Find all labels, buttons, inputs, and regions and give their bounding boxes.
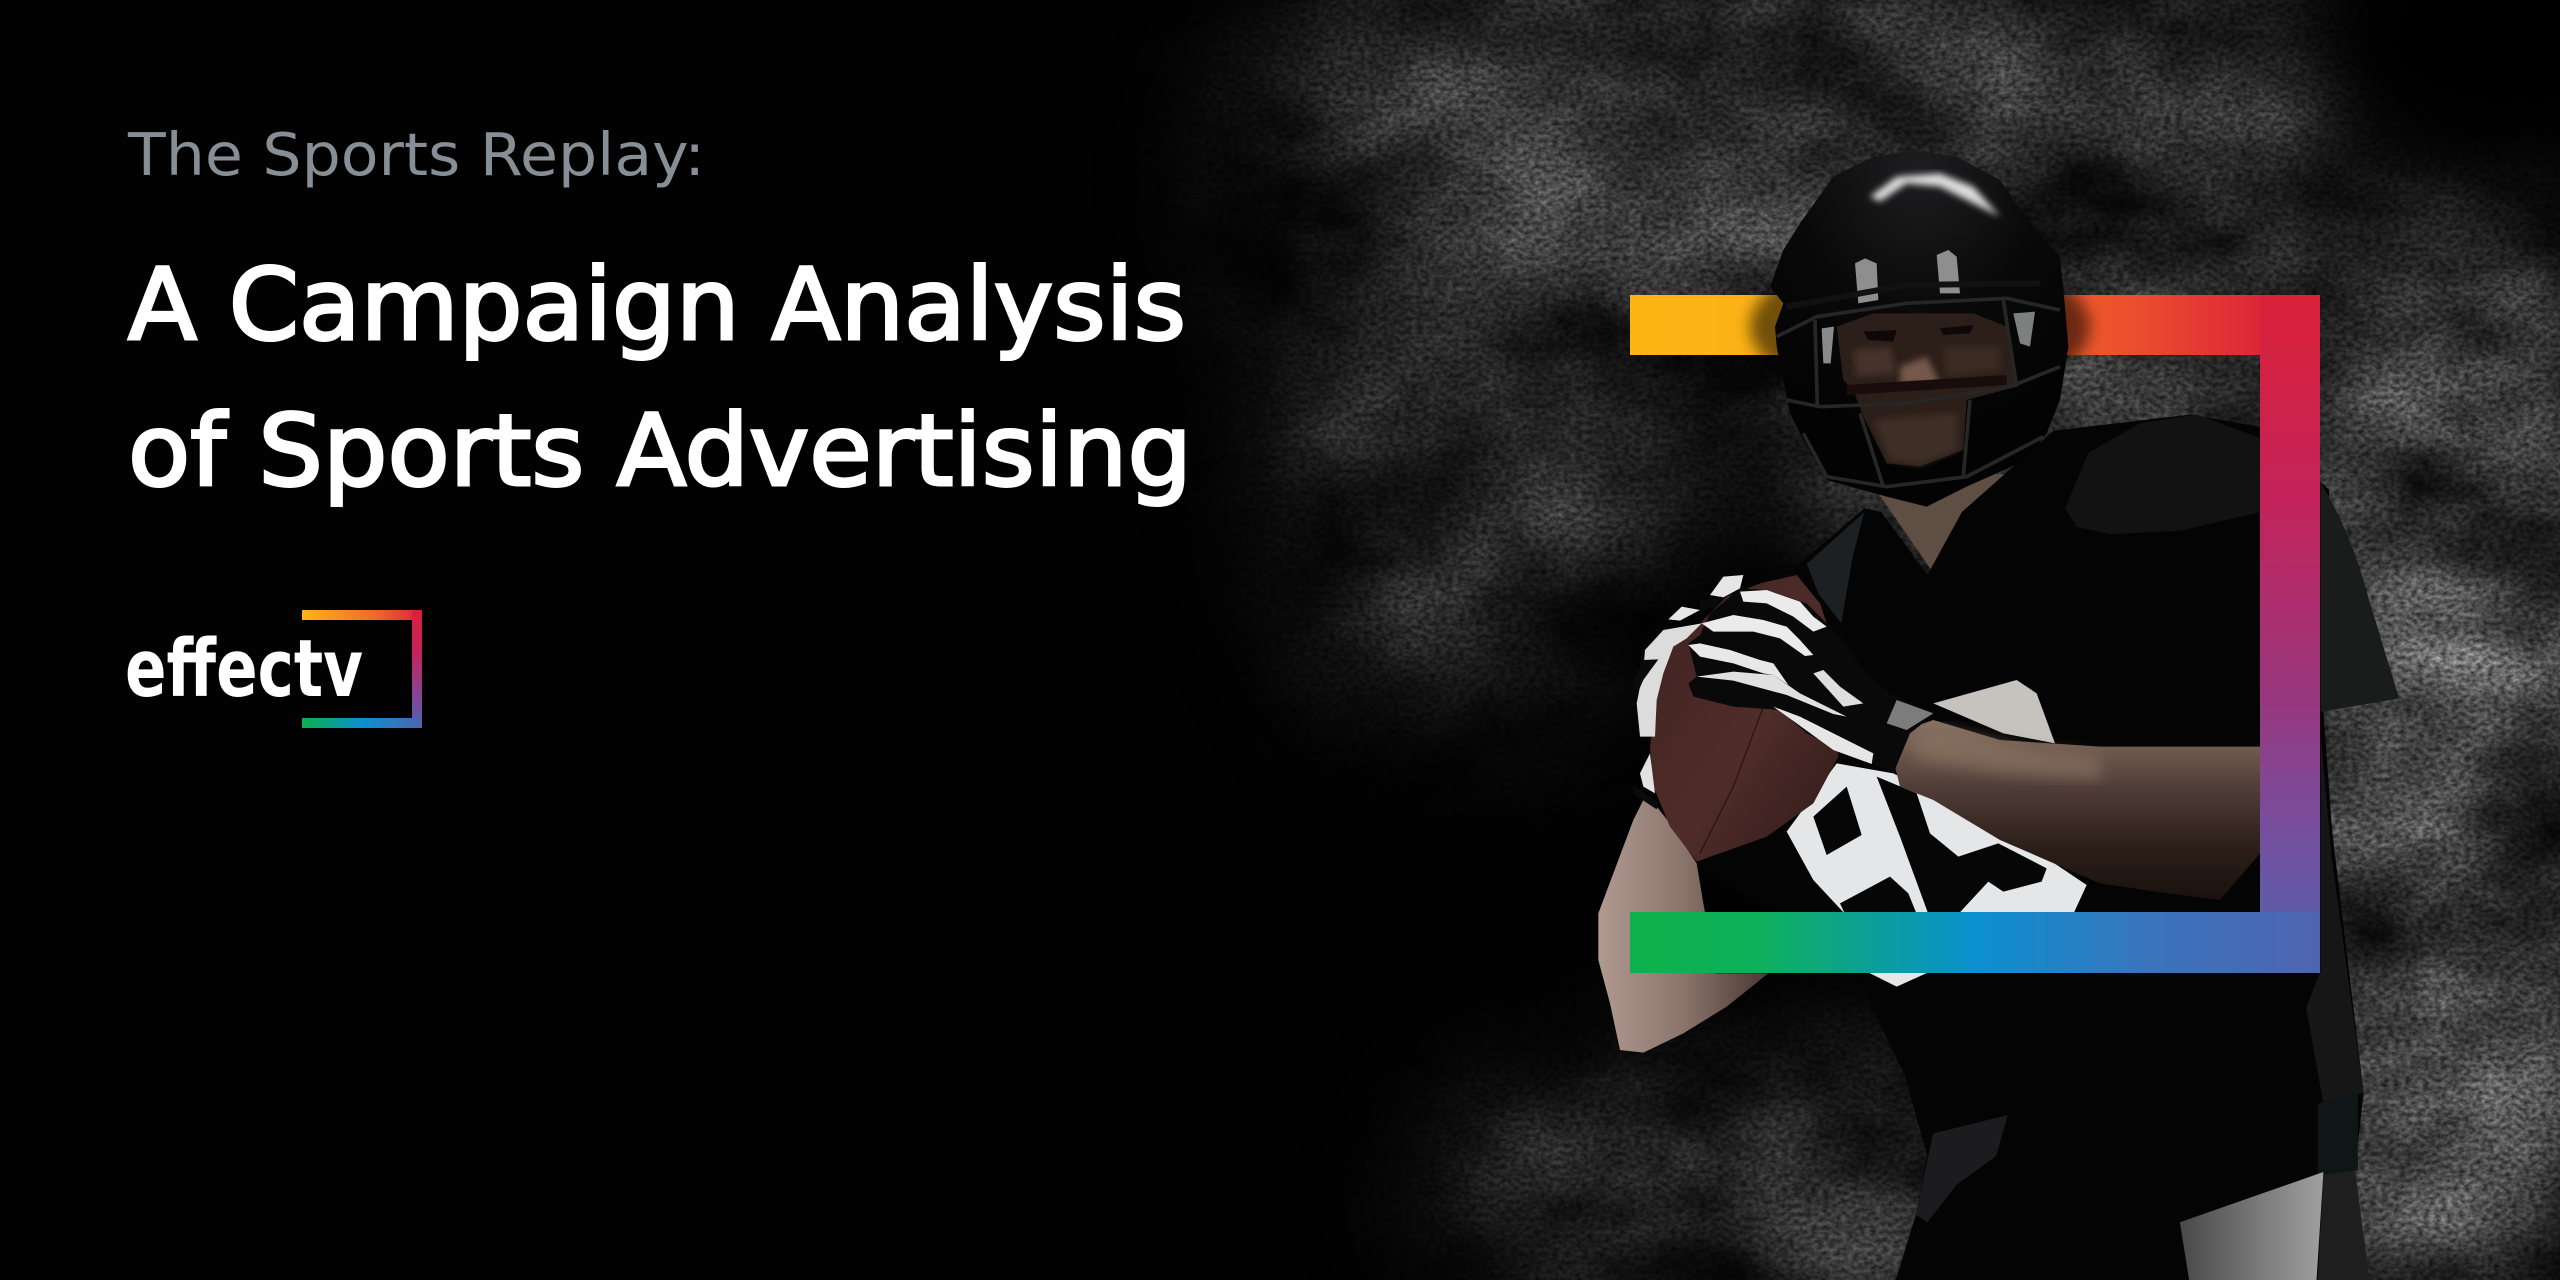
subtitle: The Sports Replay: (127, 120, 705, 189)
jersey number (1787, 680, 2087, 987)
torso and pants (1698, 414, 2399, 1280)
neck (1879, 468, 2013, 573)
shoulder pad (2065, 414, 2260, 534)
logo frame (302, 610, 422, 728)
title line 2: of Sports Advertising (128, 394, 1192, 509)
visor gaps (2013, 312, 2035, 347)
jersey side (2306, 734, 2364, 1104)
face (1837, 313, 2017, 467)
upper arm (1598, 800, 1768, 1053)
forearm (1895, 720, 2260, 900)
jersey sleeve (2321, 483, 2399, 712)
arms, ball and number (1598, 575, 2260, 1053)
frame bottom bar (1630, 912, 2320, 973)
front glove (1688, 588, 1935, 773)
helmet highlight (1870, 173, 2000, 217)
face shading (1847, 325, 2007, 465)
football player (1598, 414, 2399, 1280)
jersey (1698, 414, 2364, 1280)
colour frame (1630, 295, 2320, 973)
frame right bar (2260, 295, 2320, 973)
jersey hem (1916, 1115, 2008, 1222)
thigh pad (2318, 1171, 2369, 1280)
visor clips (1855, 258, 1878, 303)
facemask (1777, 283, 2060, 487)
dark top-right corner (2310, 0, 2560, 160)
rear glove (1633, 575, 1743, 809)
title (128, 248, 1192, 509)
smoke cloud (1250, 0, 2560, 1280)
football (1650, 575, 1838, 862)
shoulder strap (1807, 512, 1864, 623)
effectv logo (125, 610, 422, 728)
helmet shell (1770, 150, 2068, 507)
pants (2180, 1172, 2323, 1280)
logo wordmark: effectv (125, 623, 363, 715)
title line 1: A Campaign Analysis (128, 248, 1186, 363)
frame top bar (1630, 295, 2320, 355)
lower jersey band (2318, 1093, 2358, 1174)
forearm highlight (1910, 727, 2100, 780)
helmet and face (1750, 150, 2090, 507)
helmet shadow (1750, 250, 2090, 403)
